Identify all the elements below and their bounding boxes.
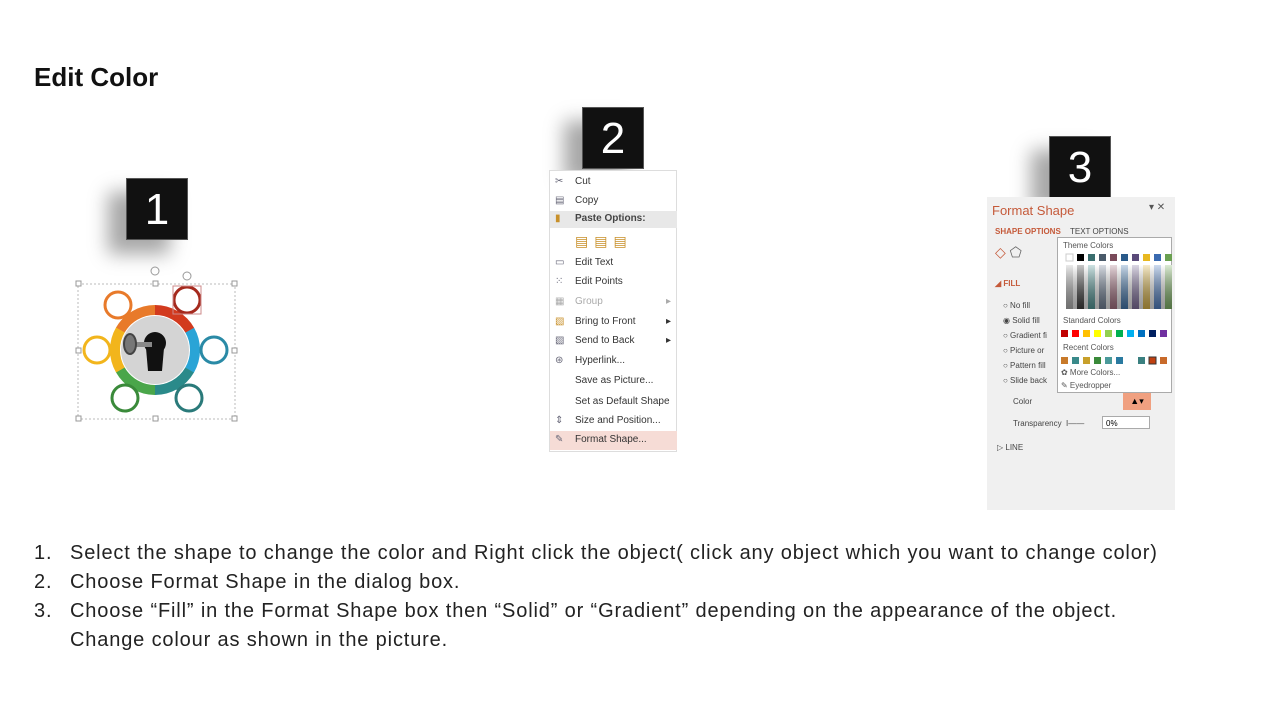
badge 3 (1049, 136, 1111, 198)
format shape panel: SHAPE OPTIONS (995, 227, 1061, 236)
context menu: Copy (575, 195, 598, 206)
format shape panel: Format Shape (992, 203, 1074, 218)
badge 1 (126, 178, 188, 240)
title: Edit Color (34, 62, 158, 92)
color picker popup: ✿ More Colors... (1061, 368, 1120, 377)
format shape panel: ○ Picture or (1003, 346, 1044, 355)
context menu: ▸ (666, 335, 671, 346)
text: Change colour as shown in the picture. (70, 629, 448, 651)
badge 2: 2 (601, 114, 625, 163)
color picker popup: Recent Colors (1063, 343, 1114, 352)
context menu: Cut (575, 176, 591, 187)
context menu: ⁙ (555, 276, 563, 287)
text: Choose “Fill” in the Format Shape box then “Solid” or “Gradient” depending on the appearance of the object. (70, 600, 1117, 622)
context menu: ▮ (555, 213, 561, 224)
format shape panel: ▲▾ (1130, 396, 1144, 406)
context menu: Paste Options: (575, 213, 646, 224)
format shape panel: ○ Pattern fill (1003, 361, 1046, 370)
context menu: Format Shape... (575, 434, 647, 445)
format shape panel: Color (1013, 397, 1032, 406)
context menu: ✂ (555, 176, 563, 187)
context menu: ✎ (555, 434, 563, 445)
text: 1. (34, 542, 52, 564)
format shape panel: ◉ Solid fill (1003, 316, 1040, 325)
context menu: ⇕ (555, 415, 563, 426)
format shape panel: ▾ ✕ (1149, 202, 1165, 213)
format shape panel: TEXT OPTIONS (1070, 227, 1129, 236)
format shape panel: ○ Slide back (1003, 376, 1047, 385)
format shape panel: ◇ ⬠ (995, 244, 1022, 260)
badge 2 (582, 107, 644, 169)
context menu: Size and Position... (575, 415, 661, 426)
context menu: ▤▤▤ (575, 233, 633, 249)
context menu: Hyperlink... (575, 355, 625, 366)
context menu: ▸ (666, 296, 671, 307)
instructions list (34, 542, 1158, 651)
context menu (549, 170, 677, 452)
format shape panel: Transparency I—— (1013, 419, 1084, 428)
badge 1: 1 (145, 185, 169, 234)
format shape panel: ◢ FILL (995, 279, 1020, 288)
context menu: ▧ (555, 316, 564, 327)
context menu: Group (575, 296, 603, 307)
context menu: Edit Points (575, 276, 623, 287)
format shape panel: ▷ LINE (997, 443, 1023, 452)
context menu: Send to Back (575, 335, 634, 346)
format shape panel: ○ Gradient fi (1003, 331, 1047, 340)
context menu: ▤ (555, 195, 564, 206)
text: Choose Format Shape in the dialog box. (70, 571, 460, 593)
color picker popup: Standard Colors (1063, 316, 1121, 325)
context menu: Edit Text (575, 257, 613, 268)
context menu: ▦ (555, 296, 564, 307)
color picker popup: ✎ Eyedropper (1061, 381, 1111, 390)
badge 3: 3 (1068, 143, 1092, 192)
text: 3. (34, 600, 52, 622)
context menu: ▭ (555, 257, 564, 268)
context menu: ▸ (666, 316, 671, 327)
context menu: Set as Default Shape (575, 396, 670, 407)
format shape panel (987, 197, 1175, 510)
format shape panel: ○ No fill (1003, 301, 1030, 310)
diagram: keyhole infographic (76, 266, 238, 422)
context menu: ▧ (555, 335, 564, 346)
context menu: Bring to Front (575, 316, 636, 327)
format shape panel: 0% (1106, 419, 1118, 428)
color picker popup (1057, 237, 1172, 393)
color picker popup: Theme Colors (1063, 241, 1113, 250)
text: Select the shape to change the color and Right click the object( click any object which you want to change color) (70, 542, 1158, 564)
text: 2. (34, 571, 52, 593)
context menu: Save as Picture... (575, 375, 653, 386)
context menu: ⊛ (555, 355, 563, 366)
